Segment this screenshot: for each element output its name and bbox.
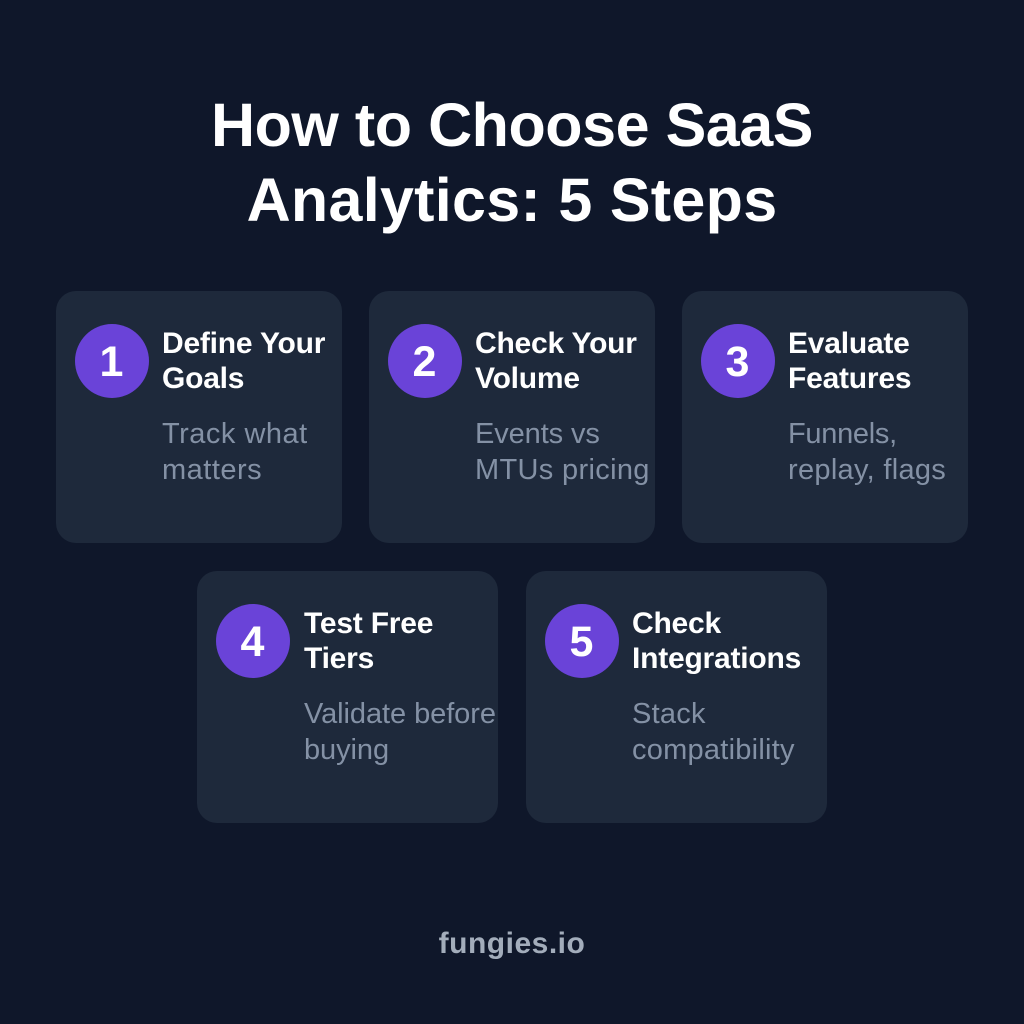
title — [211, 91, 813, 234]
step 2 number — [388, 324, 462, 398]
step 1 heading: Define Your — [162, 327, 325, 360]
step 4 text: Validate before — [304, 698, 496, 730]
footer brand: fungies.io — [439, 927, 585, 960]
step 3 text — [788, 418, 946, 486]
step 3 heading — [788, 327, 911, 395]
title: Analytics: 5 Steps — [247, 166, 777, 234]
step 5 number — [544, 604, 618, 678]
step 5 text — [632, 698, 795, 766]
step 4 number — [216, 604, 290, 678]
step 5 heading: Integrations — [632, 642, 801, 675]
step 3 heading: Features — [788, 362, 911, 395]
step 4 heading: Tiers — [304, 642, 374, 675]
step 3 heading: Evaluate — [788, 327, 910, 360]
panel: step 4 — [197, 571, 498, 823]
step 2 heading: Volume — [475, 362, 580, 395]
title: How to Choose SaaS — [211, 91, 813, 159]
step 4 text: buying — [304, 734, 389, 766]
step 2 text — [475, 418, 650, 486]
step 2 text: MTUs pricing — [475, 454, 650, 486]
step 3 text: replay, flags — [788, 454, 946, 486]
step 2 text: Events vs — [475, 418, 600, 450]
step 4 number: 4 — [241, 618, 264, 666]
step 5 heading — [632, 607, 801, 675]
panel: step 5 — [526, 571, 827, 823]
step 4 heading — [304, 607, 433, 675]
panel: step 3 — [682, 291, 968, 543]
step 1 number: 1 — [100, 338, 123, 386]
step 2 heading: Check Your — [475, 327, 637, 360]
step 1 text: matters — [162, 454, 262, 486]
step 4 heading: Test Free — [304, 607, 433, 640]
step 5 text: Stack — [632, 698, 706, 730]
step 5 number: 5 — [570, 618, 593, 666]
step 4 text — [304, 698, 496, 766]
step 3 number — [700, 324, 774, 398]
step 1 number — [74, 324, 148, 398]
panel: step 1 — [56, 291, 342, 543]
step 1 heading: Goals — [162, 362, 244, 395]
step 1 text: Track what — [162, 418, 308, 450]
step 3 text: Funnels, — [788, 418, 897, 450]
step 1 heading — [162, 327, 325, 395]
step 2 heading — [475, 327, 637, 395]
step 1 text — [162, 418, 308, 486]
panel: step 2 — [369, 291, 655, 543]
step 3 number: 3 — [726, 338, 749, 386]
step 2 number: 2 — [413, 338, 436, 386]
step 5 heading: Check — [632, 607, 721, 640]
step 5 text: compatibility — [632, 734, 795, 766]
